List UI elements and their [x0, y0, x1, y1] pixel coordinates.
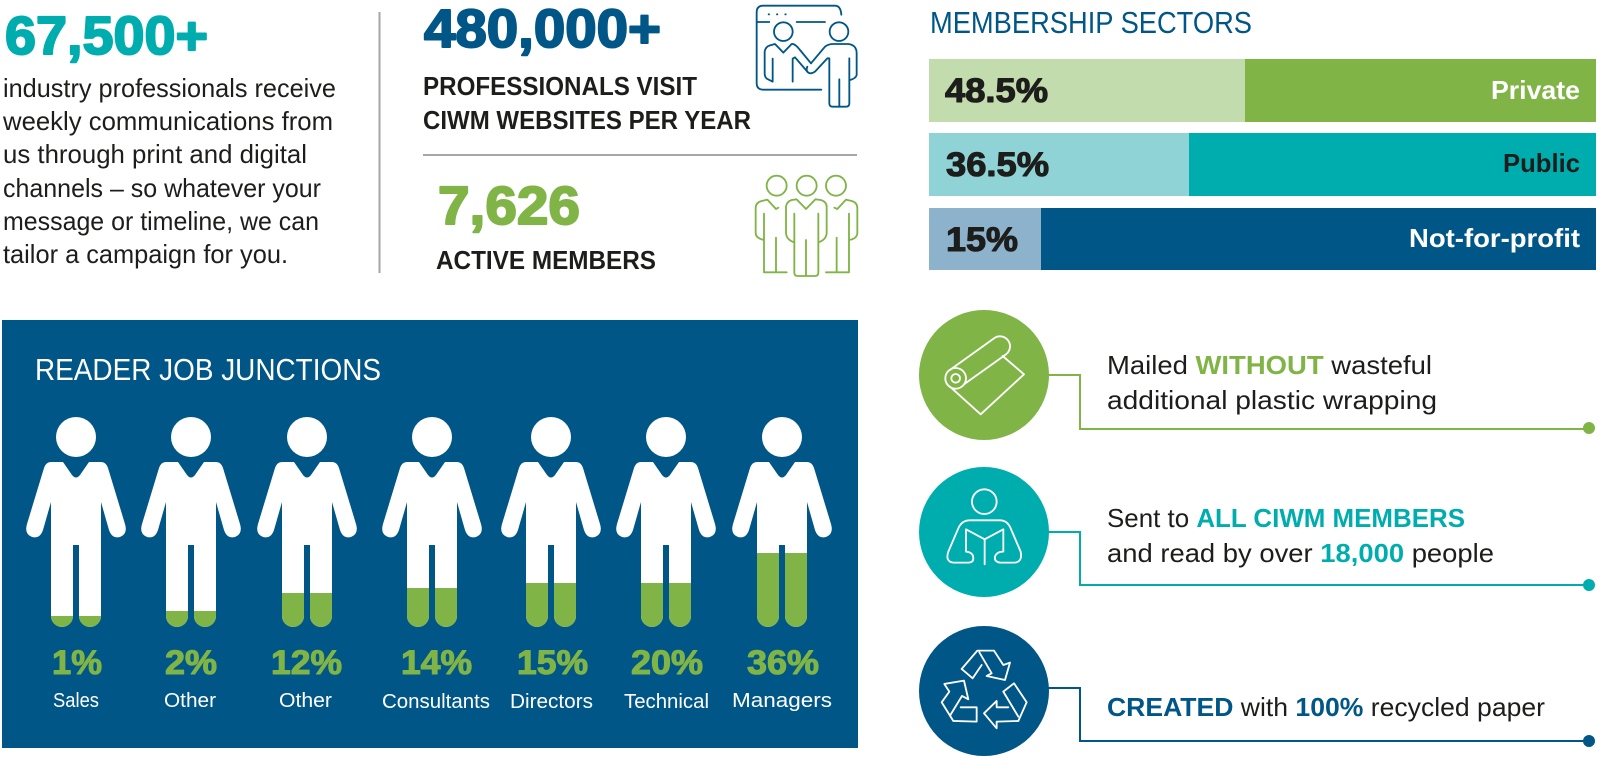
- bar: public 36.5%: Public: [1503, 148, 1580, 178]
- connector line: [1048, 688, 1589, 741]
- bar: private 48.5%: Private: [1491, 75, 1580, 105]
- figure: directors 15%: Directors: [510, 691, 593, 713]
- bar: not-for-profit 15%: Not-for-profit: [1409, 223, 1580, 253]
- stat: 7,626 active members: [436, 176, 656, 275]
- bar: private 48.5%: [929, 59, 1596, 122]
- icon: person reading: [947, 489, 1021, 564]
- text: [1107, 350, 1437, 415]
- body text: us through print and digital: [3, 139, 307, 169]
- icon: recycling arrows: [942, 651, 1027, 728]
- big number: 67,500+: 67,500+: [5, 6, 208, 66]
- figure: technical 20%: [616, 417, 716, 713]
- bar: private 48.5%: 48.5%: [945, 72, 1048, 110]
- figure: managers 36%: 36%: [747, 644, 819, 682]
- text: Mailed WITHOUT wasteful: [1107, 350, 1432, 380]
- figure: sales 1%: 1%: [52, 644, 102, 682]
- body text: channels – so whatever your: [3, 173, 321, 203]
- body text: tailor a campaign for you.: [3, 239, 288, 269]
- icon: three people: [756, 176, 857, 276]
- stat: 480,000+ website visitors: [423, 0, 751, 135]
- big number: 480,000+: 480,000+: [424, 0, 661, 59]
- bar: public 36.5%: [929, 133, 1596, 196]
- bar: not-for-profit 15%: 15%: [946, 221, 1018, 259]
- figure: technical 20%: 20%: [631, 644, 703, 682]
- icon: paper roll: [945, 336, 1024, 414]
- text: Sent to ALL CIWM MEMBERS: [1107, 503, 1465, 533]
- icon: handshake: [757, 6, 857, 107]
- text: [1107, 503, 1494, 568]
- figure: other 2%: [141, 417, 241, 712]
- body text: weekly communications from: [2, 106, 333, 136]
- stat: 67,500+ professionals: [2, 6, 336, 269]
- heading: MEMBERSHIP SECTORS: [930, 5, 1252, 40]
- bar: not-for-profit 15%: [929, 208, 1596, 270]
- text: CREATED with 100% recycled paper: [1107, 692, 1545, 722]
- figure: consultants 14%: 14%: [401, 644, 472, 682]
- divider: [423, 154, 857, 156]
- caption: CIWM WEBSITES PER YEAR: [423, 105, 751, 135]
- body text: [2, 73, 336, 269]
- caption: ACTIVE MEMBERS: [436, 245, 656, 275]
- figure: directors 15%: [501, 417, 601, 713]
- figure: other 12%: [257, 417, 357, 712]
- text: additional plastic wrapping: [1107, 385, 1437, 415]
- caption: [423, 71, 751, 135]
- connector line: [1048, 532, 1589, 585]
- big number: 7,626: 7,626: [438, 176, 580, 236]
- feature: sent to all members: [919, 467, 1595, 597]
- body text: message or timeline, we can: [3, 206, 319, 236]
- figure: consultants 14%: [382, 417, 490, 713]
- caption: PROFESSIONALS VISIT: [423, 71, 697, 101]
- feature: recycled paper: [919, 626, 1595, 756]
- connector line: [1048, 375, 1589, 429]
- figure: directors 15%: 15%: [517, 644, 588, 682]
- figure: technical 20%: Technical: [624, 691, 709, 713]
- figure: managers 36%: [732, 417, 832, 712]
- figure: other 2%: Other: [164, 690, 216, 712]
- panel: reader job functions: [2, 320, 858, 748]
- body text: industry professionals receive: [3, 73, 336, 103]
- figure: other 2%: 2%: [165, 644, 217, 682]
- figure: other 12%: 12%: [271, 644, 342, 682]
- heading: READER JOB JUNCTIONS: [35, 352, 381, 387]
- panel: membership sectors: [929, 5, 1596, 270]
- feature: no plastic wrapping: [919, 310, 1595, 440]
- figure: sales 1%: Sales: [53, 690, 99, 712]
- text: and read by over 18,000 people: [1107, 538, 1494, 568]
- bar: public 36.5%: 36.5%: [946, 146, 1049, 184]
- figure: managers 36%: Managers: [732, 690, 832, 712]
- figure: other 12%: Other: [279, 690, 332, 712]
- figure: consultants 14%: Consultants: [382, 691, 490, 713]
- figure: sales 1%: [26, 417, 126, 712]
